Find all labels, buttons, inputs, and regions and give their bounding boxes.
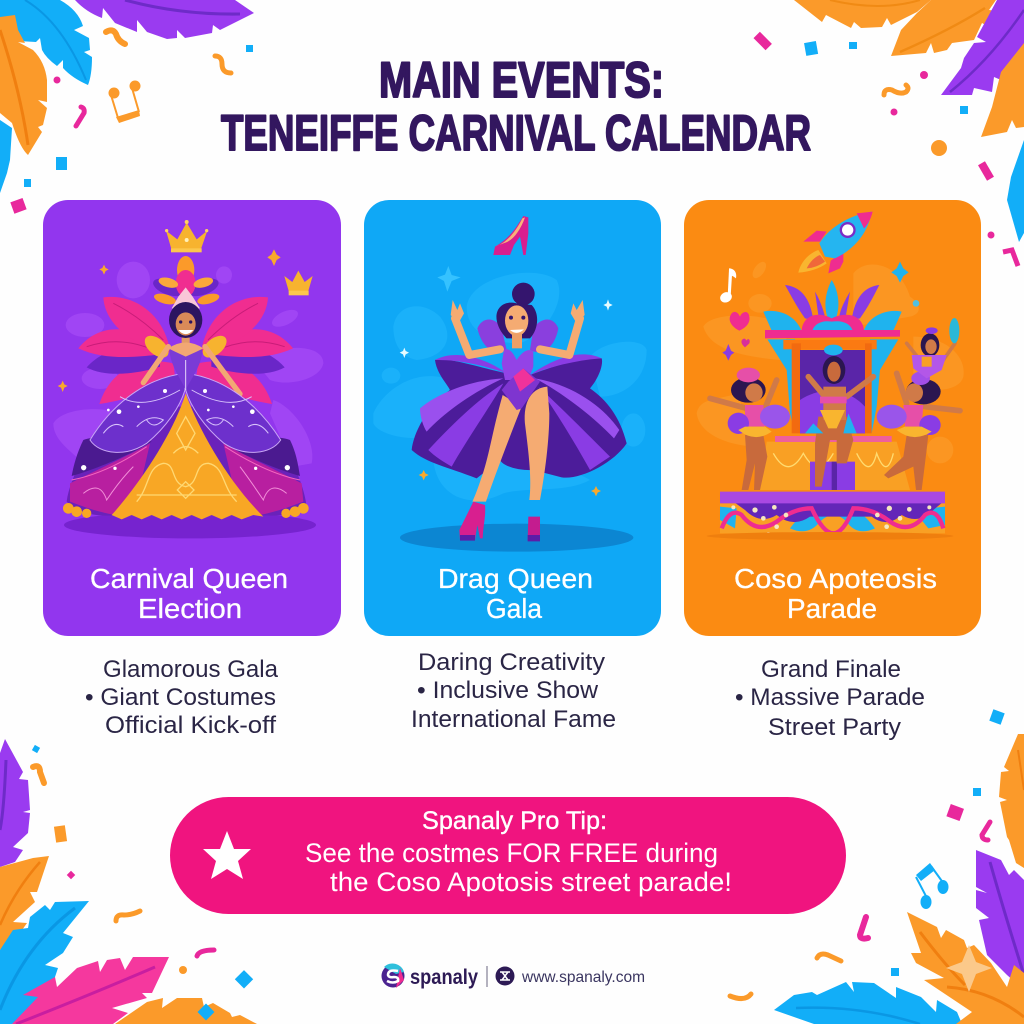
panel title: Carnival Queen [90, 563, 288, 594]
confetti and music note: top left [10, 30, 253, 214]
text block: Coso Apoteosis features [735, 656, 925, 741]
footer: brand logo and website: spanaly [410, 966, 478, 989]
panel title [438, 563, 593, 624]
callout text: the Coso Apotosis street parade! [330, 867, 732, 897]
title: TENEIFFE CARNIVAL CALENDAR [221, 105, 811, 161]
float canopy feathers [763, 280, 902, 335]
panel: Drag Queen Gala [364, 200, 661, 636]
illustration: parade float [697, 212, 964, 540]
dancer: upper right [907, 318, 959, 378]
panel: Carnival Queen Election [43, 200, 341, 636]
hands [451, 300, 585, 323]
queen head and bodice [168, 302, 203, 390]
head and hair [496, 283, 537, 348]
title [221, 52, 811, 161]
floor shadow [400, 524, 633, 552]
dancer: centre [805, 345, 873, 487]
float base drapes [760, 436, 910, 490]
callout text: See the costmes FOR FREE during [305, 838, 718, 868]
corner feathers: bottom left [0, 739, 257, 1024]
text block: Carnival Queen features: • Giant Costumes [85, 684, 276, 711]
sparkles [400, 266, 613, 496]
panel title: Coso Apoteosis [734, 563, 937, 594]
panel: Coso Apoteosis Parade [684, 200, 981, 636]
sparkles [58, 249, 281, 392]
wings [477, 320, 558, 352]
icon: spanaly logo [382, 963, 404, 988]
panel title: Election [138, 593, 242, 624]
text block: Drag Queen features [411, 649, 616, 733]
float stage frame [765, 330, 900, 433]
title: MAIN EVENTS: [379, 52, 664, 108]
footer: brand logo and website: www.spanaly.com [521, 969, 645, 986]
corner feathers: top right [794, 0, 1024, 242]
panel title: Parade [787, 593, 877, 624]
illustration: carnival queen in gown [53, 220, 323, 538]
text block: Drag Queen features: • Inclusive Show [417, 677, 598, 704]
float platform [707, 492, 953, 540]
skirt: outer layer [67, 407, 307, 516]
scalloped hem [63, 503, 309, 518]
icon: star [203, 831, 251, 879]
corner feathers: bottom right [774, 734, 1024, 1024]
panel title [734, 563, 937, 624]
text block: Carnival Queen features: Official Kick-off [105, 712, 276, 739]
shoes [459, 502, 540, 541]
footer: brand logo and website [382, 963, 645, 989]
icon: web globe [496, 966, 514, 986]
illustration: drag queen dancer [373, 216, 647, 552]
rocket [798, 212, 873, 273]
arms [143, 347, 240, 394]
corner feathers: top left [0, 0, 254, 193]
hearts and sparkles [722, 262, 919, 361]
confetti: bottom left [32, 745, 253, 1020]
text block: Coso Apoteosis features: • Massive Parade [735, 684, 925, 711]
crown: large [165, 220, 208, 252]
panel title [90, 563, 288, 624]
text block: Carnival Queen features: Glamorous Gala [103, 656, 278, 683]
high heel shoe icon [493, 216, 528, 255]
callout: Spanaly Pro Tip [170, 797, 846, 914]
overskirt panels [81, 373, 290, 470]
panel title: Gala [486, 593, 543, 624]
callout text [305, 807, 732, 897]
panel title: Drag Queen [438, 563, 593, 594]
confetti and music note: bottom right [730, 709, 1005, 999]
crown: small [284, 271, 313, 295]
skirt: golden centre panel [112, 393, 263, 519]
text block: Drag Queen features: International Fame [411, 706, 616, 733]
floor shadow [64, 512, 316, 538]
confetti: top right [754, 32, 1018, 266]
dancer: right [877, 372, 960, 490]
feather wings [78, 297, 293, 404]
arms [455, 318, 580, 355]
text block: Carnival Queen features [85, 656, 278, 739]
legs [472, 387, 549, 502]
leotard [502, 349, 540, 410]
dancer: left [710, 368, 790, 490]
callout text: Spanaly Pro Tip: [422, 807, 607, 835]
headdress [151, 256, 221, 308]
text block: Coso Apoteosis features: Grand Finale [761, 656, 901, 683]
cape skirt [412, 354, 627, 478]
text block: Coso Apoteosis features: Street Party [768, 714, 902, 741]
text block: Drag Queen features: Daring Creativity [418, 649, 606, 676]
music note [718, 268, 736, 304]
